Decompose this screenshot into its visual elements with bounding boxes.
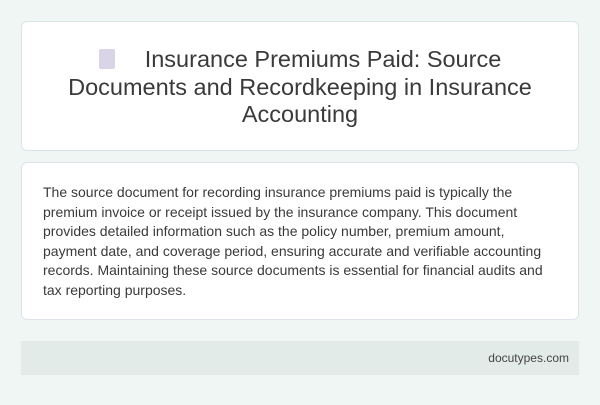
footer bar — [21, 341, 579, 375]
panel: description — [21, 162, 579, 320]
footer text: docutypes.com — [488, 351, 569, 365]
icon: receipt — [99, 49, 115, 69]
panel: title — [21, 21, 579, 151]
text block: The source document for recording insurance premiums paid is typically the premium invoice or receipt issued by the insurance company. This document provides detailed information such as the policy number, premium amount, payment date, and coverage period, ensuring accurate and verifiable accounting records. Maintaining these source documents is essential for financial audits and tax reporting purposes. — [43, 184, 543, 298]
title: Insurance Premiums Paid: Source Documents and Recordkeeping in Insurance Accounting — [68, 46, 532, 127]
